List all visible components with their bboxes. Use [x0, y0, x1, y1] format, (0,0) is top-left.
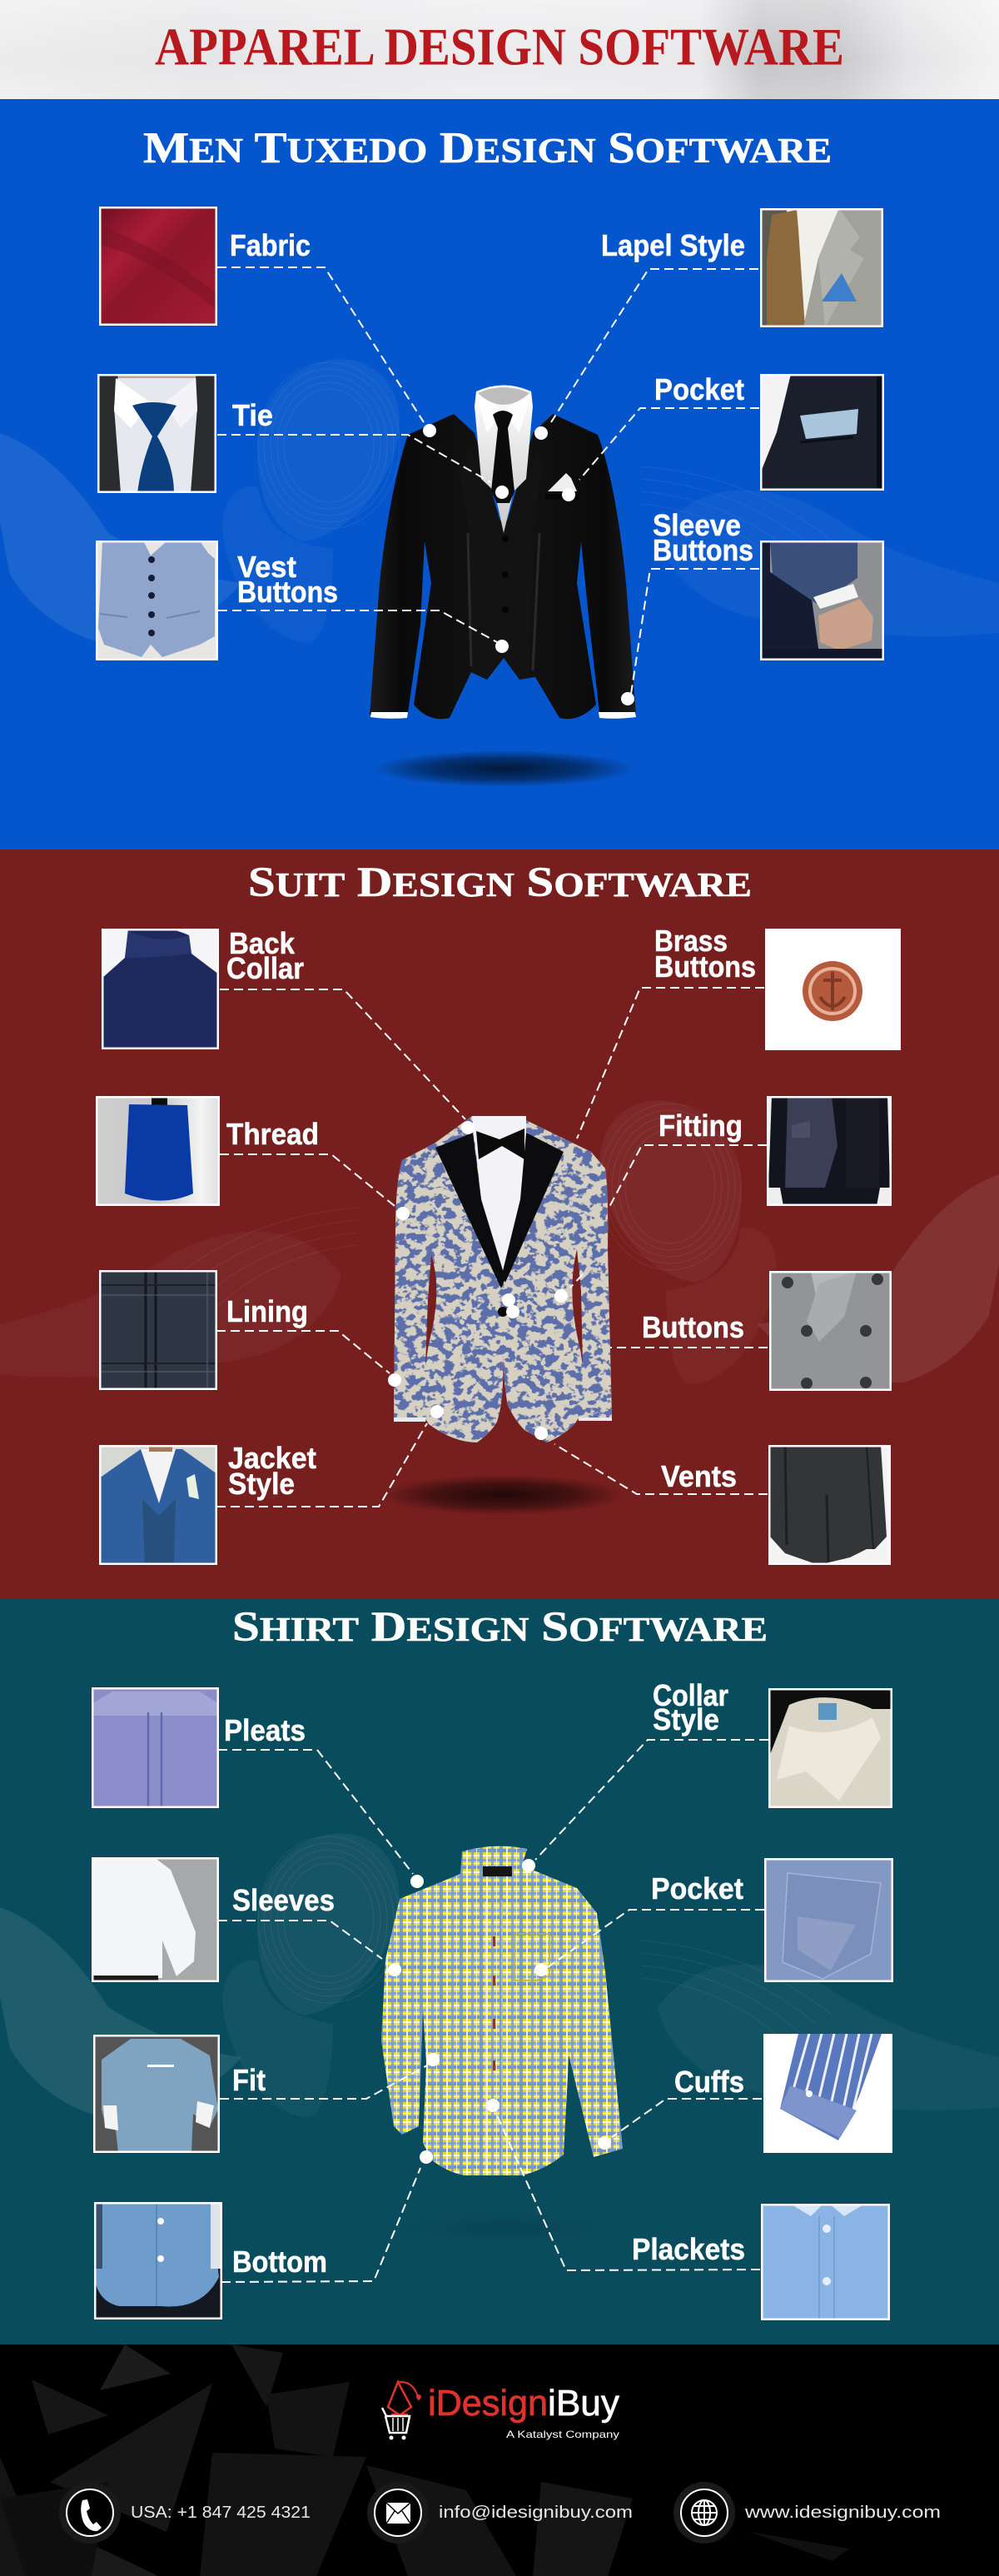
callout: vents [534, 1427, 891, 1565]
tagline: A Katalyst Company [506, 2429, 619, 2440]
label: tie: Tie [232, 398, 273, 432]
callout: fitting [554, 1096, 892, 1303]
leader: thread [220, 1154, 410, 1220]
shadow under shirt [395, 2211, 612, 2245]
icon: envelope [367, 2482, 429, 2544]
leader: lining [216, 1331, 401, 1387]
label: lining: Lining [226, 1294, 308, 1328]
thumbnail: fitting [767, 1096, 892, 1206]
leader: vest buttons [218, 610, 509, 653]
label: plackets: Plackets [632, 2232, 745, 2266]
thumbnail: lining [99, 1270, 217, 1390]
shadow under suit [383, 1475, 624, 1515]
leader: bottom [221, 2150, 433, 2282]
leader: jacket style [216, 1405, 444, 1507]
leader: brass buttons [502, 988, 764, 1318]
thumbnail: shirt pocket [764, 1858, 893, 1982]
contact: email [367, 2482, 633, 2544]
thumbnail: vents [768, 1445, 891, 1565]
thumbnail: sleeve [760, 541, 884, 660]
leader: sleeve buttons [621, 569, 759, 705]
label: jacket style: Jacket [228, 1441, 316, 1475]
leader: shirt pocket [534, 1910, 764, 1976]
shadow under tuxedo [372, 750, 635, 787]
thumbnail: tie [97, 374, 216, 493]
label: collar style: Collar [653, 1678, 728, 1712]
leader: buttons [610, 1347, 768, 1348]
heading: suit: SUIT DESIGN SOFTWARE [248, 859, 752, 906]
leader: plackets [486, 2099, 760, 2270]
callout: sleeve buttons [621, 508, 884, 705]
panel: suit design software [0, 850, 999, 1599]
thumbnail: jacket style [99, 1445, 217, 1565]
thumbnail: vest [96, 541, 218, 660]
panel: shirt design software [0, 1599, 999, 2344]
label: pleats: Pleats [224, 1713, 306, 1747]
callout: shirt pocket [534, 1858, 893, 1982]
callout: tie [97, 374, 509, 499]
leader: cuffs [598, 2099, 762, 2150]
callout: buttons [610, 1271, 892, 1391]
thumbnail: double-breasted buttons [769, 1271, 892, 1391]
label: thread: Thread [226, 1117, 319, 1151]
leader: back collar [220, 989, 475, 1134]
callout: bottom [94, 2150, 433, 2319]
label: brass buttons: Buttons [654, 949, 756, 984]
label: sleeve buttons: Buttons [653, 533, 753, 567]
contact: website [673, 2482, 941, 2544]
thumbnail: fit [93, 2035, 220, 2153]
label: back collar: Back [229, 926, 296, 960]
label: collar style: Style [653, 1702, 719, 1736]
wordmark: iDesign [428, 2383, 548, 2424]
thumbnail: plackets [761, 2204, 890, 2320]
leader: vents [534, 1427, 768, 1494]
leader: fit [220, 2053, 440, 2099]
label: back collar: Collar [226, 951, 304, 985]
leader: fitting [554, 1145, 767, 1303]
website address: www.idesignibuy.com [744, 2504, 941, 2522]
callout: brass buttons [502, 924, 901, 1318]
thumbnail: sleeves [92, 1857, 219, 1982]
callout: pleats [92, 1687, 424, 1888]
leader: fabric [217, 267, 436, 437]
illustration: plaid shirt [381, 1846, 623, 2175]
label: vest buttons: Vest [237, 550, 296, 584]
leader: tie [217, 435, 509, 499]
contact: phone [59, 2482, 311, 2544]
thumbnail: pleats [92, 1687, 219, 1808]
label: vest buttons: Buttons [237, 575, 338, 609]
leader: pleats [218, 1750, 424, 1888]
header banner [0, 0, 999, 99]
callout: thread [96, 1096, 410, 1220]
callout: collar style [522, 1678, 892, 1872]
label: jacket style: Style [228, 1467, 295, 1501]
leader: pocket [562, 408, 759, 501]
thumbnail: pocket [760, 374, 884, 491]
logo: iDesigniBuy [382, 2382, 619, 2440]
label: cuffs: Cuffs [674, 2065, 744, 2099]
title: APPAREL DESIGN SOFTWARE [155, 17, 844, 77]
callout: back collar [102, 926, 475, 1134]
thumbnail: lapel [760, 208, 883, 327]
callout: fabric [99, 207, 436, 437]
label: fabric: Fabric [230, 228, 311, 262]
heading: men tuxedo: MEN TUXEDO DESIGN SOFTWARE [143, 124, 832, 172]
email address: info@idesignibuy.com [439, 2504, 633, 2522]
callout: cuffs [598, 2034, 892, 2153]
illustration: tuxedo jacket [370, 385, 636, 719]
label: brass buttons: Brass [654, 924, 728, 958]
label: pocket: Pocket [654, 372, 744, 406]
callout: lapel style [534, 208, 883, 440]
label: bottom: Bottom [232, 2245, 327, 2279]
callout: pocket [562, 372, 884, 501]
thumbnail: cuffs [763, 2034, 892, 2153]
icon: globe [673, 2482, 735, 2544]
callout: jacket style [99, 1405, 444, 1565]
callout: plackets [486, 2099, 890, 2320]
callout: lining [99, 1270, 401, 1390]
thumbnail: collar [768, 1688, 892, 1808]
callout: fit [93, 2035, 440, 2153]
panel: footer [0, 2344, 999, 2576]
label: fitting: Fitting [659, 1109, 743, 1143]
icon: pen and cart [382, 2382, 421, 2440]
panel: men tuxedo design software [0, 99, 999, 850]
thumbnail: back collar [102, 929, 219, 1049]
label: buttons: Buttons [642, 1310, 744, 1344]
thumbnail: brass button [765, 929, 901, 1050]
label: shirt pocket: Pocket [651, 1871, 743, 1906]
thumbnail: thread [96, 1096, 220, 1206]
callout: vest buttons [96, 541, 509, 660]
thumbnail: fabric [99, 207, 217, 326]
label: sleeve buttons: Sleeve [653, 508, 741, 542]
phone number: USA: +1 847 425 4321 [131, 2504, 311, 2522]
leader: sleeves [218, 1921, 401, 1976]
leader: collar style [522, 1740, 768, 1872]
label: lapel style: Lapel Style [601, 228, 745, 262]
label: vents: Vents [661, 1459, 737, 1493]
illustration: patterned suit jacket [387, 1108, 616, 1449]
thumbnail: bottom [94, 2202, 222, 2319]
icon: phone [59, 2482, 121, 2544]
wordmark: iBuy [548, 2383, 619, 2424]
heading: shirt: SHIRT DESIGN SOFTWARE [232, 1604, 768, 1651]
callout: sleeves [92, 1857, 401, 1982]
leader: lapel style [534, 269, 758, 440]
label: sleeves: Sleeves [232, 1883, 335, 1917]
label: fit: Fit [232, 2063, 266, 2097]
